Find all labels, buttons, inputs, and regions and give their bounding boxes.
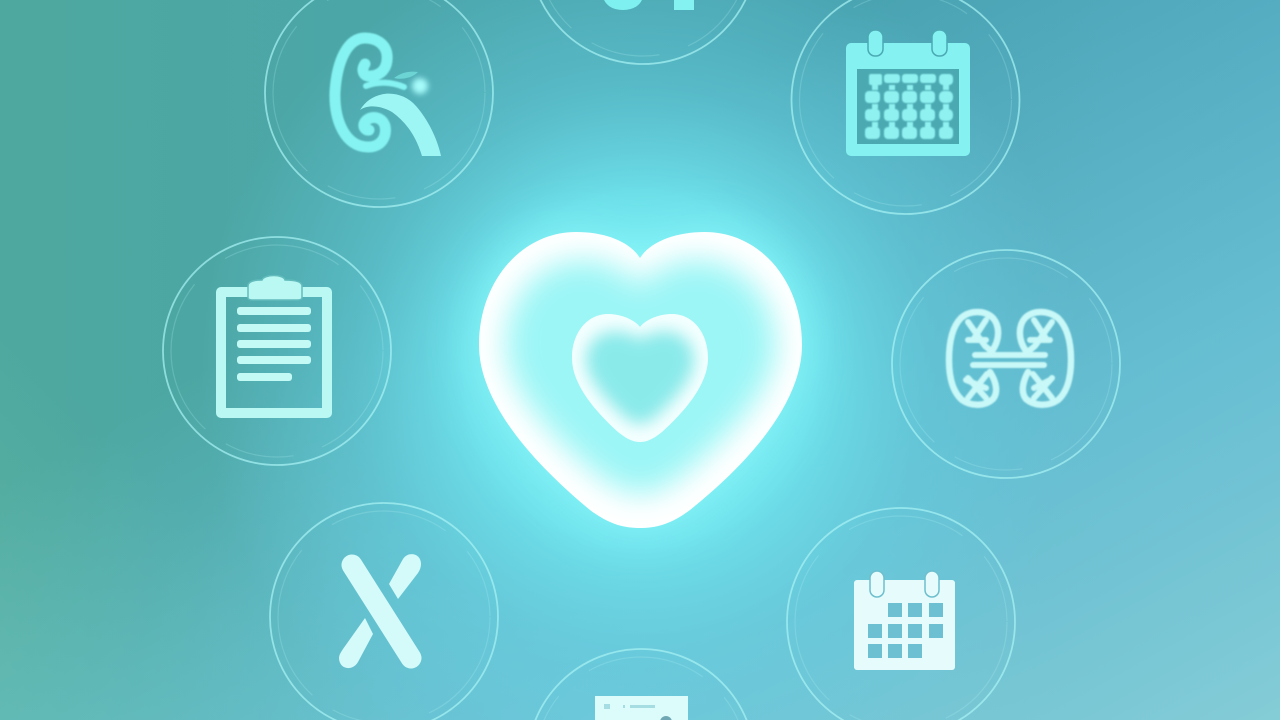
icon: clipboard board: [221, 292, 327, 413]
icon: calendar rings: [870, 571, 939, 597]
heart outer glow: [479, 232, 802, 528]
icon: kidneys: [949, 312, 1071, 405]
icon: calendar body: [846, 43, 970, 156]
icon: document header marks: [604, 704, 672, 720]
icon: document card: [595, 696, 688, 720]
icon: calendar date squares: [868, 603, 943, 658]
icon circle: top (cropped): [529, 0, 757, 64]
icon: short lower bar: [339, 618, 373, 668]
icon circle: crossed bars: [270, 503, 498, 720]
icon circle: calendar: [787, 508, 1015, 720]
icon circle: bottom document (cropped): [527, 649, 755, 720]
icon circle: ear cochlea: [265, 0, 493, 207]
icon circle: abacus calendar: [792, 0, 1020, 214]
icon: calendar rings: [868, 30, 947, 56]
icon: short upper bar: [389, 554, 421, 599]
icon: clipboard text lines: [237, 307, 311, 381]
central glowing heart: [470, 225, 810, 535]
outer heart: [470, 225, 810, 535]
right kidney branches: [1030, 320, 1052, 398]
icon: glowing spark: [394, 72, 428, 94]
icon: calendar page: [854, 580, 955, 670]
icon circle: kidneys: [892, 250, 1120, 478]
icon: long bar: [352, 565, 411, 658]
icon circle: clipboard: [163, 237, 391, 465]
left kidney outline: [949, 312, 998, 405]
right kidney outline: [1020, 312, 1071, 405]
icon: clipboard clip: [248, 276, 302, 300]
icon: cochlea tail: [360, 94, 441, 156]
icon: cochlea spiral: [335, 38, 404, 147]
left kidney branches: [966, 320, 990, 398]
icon: calendar date cells: [865, 74, 953, 139]
connecting ureter bars: [973, 355, 1045, 365]
inner heart: [572, 314, 708, 442]
